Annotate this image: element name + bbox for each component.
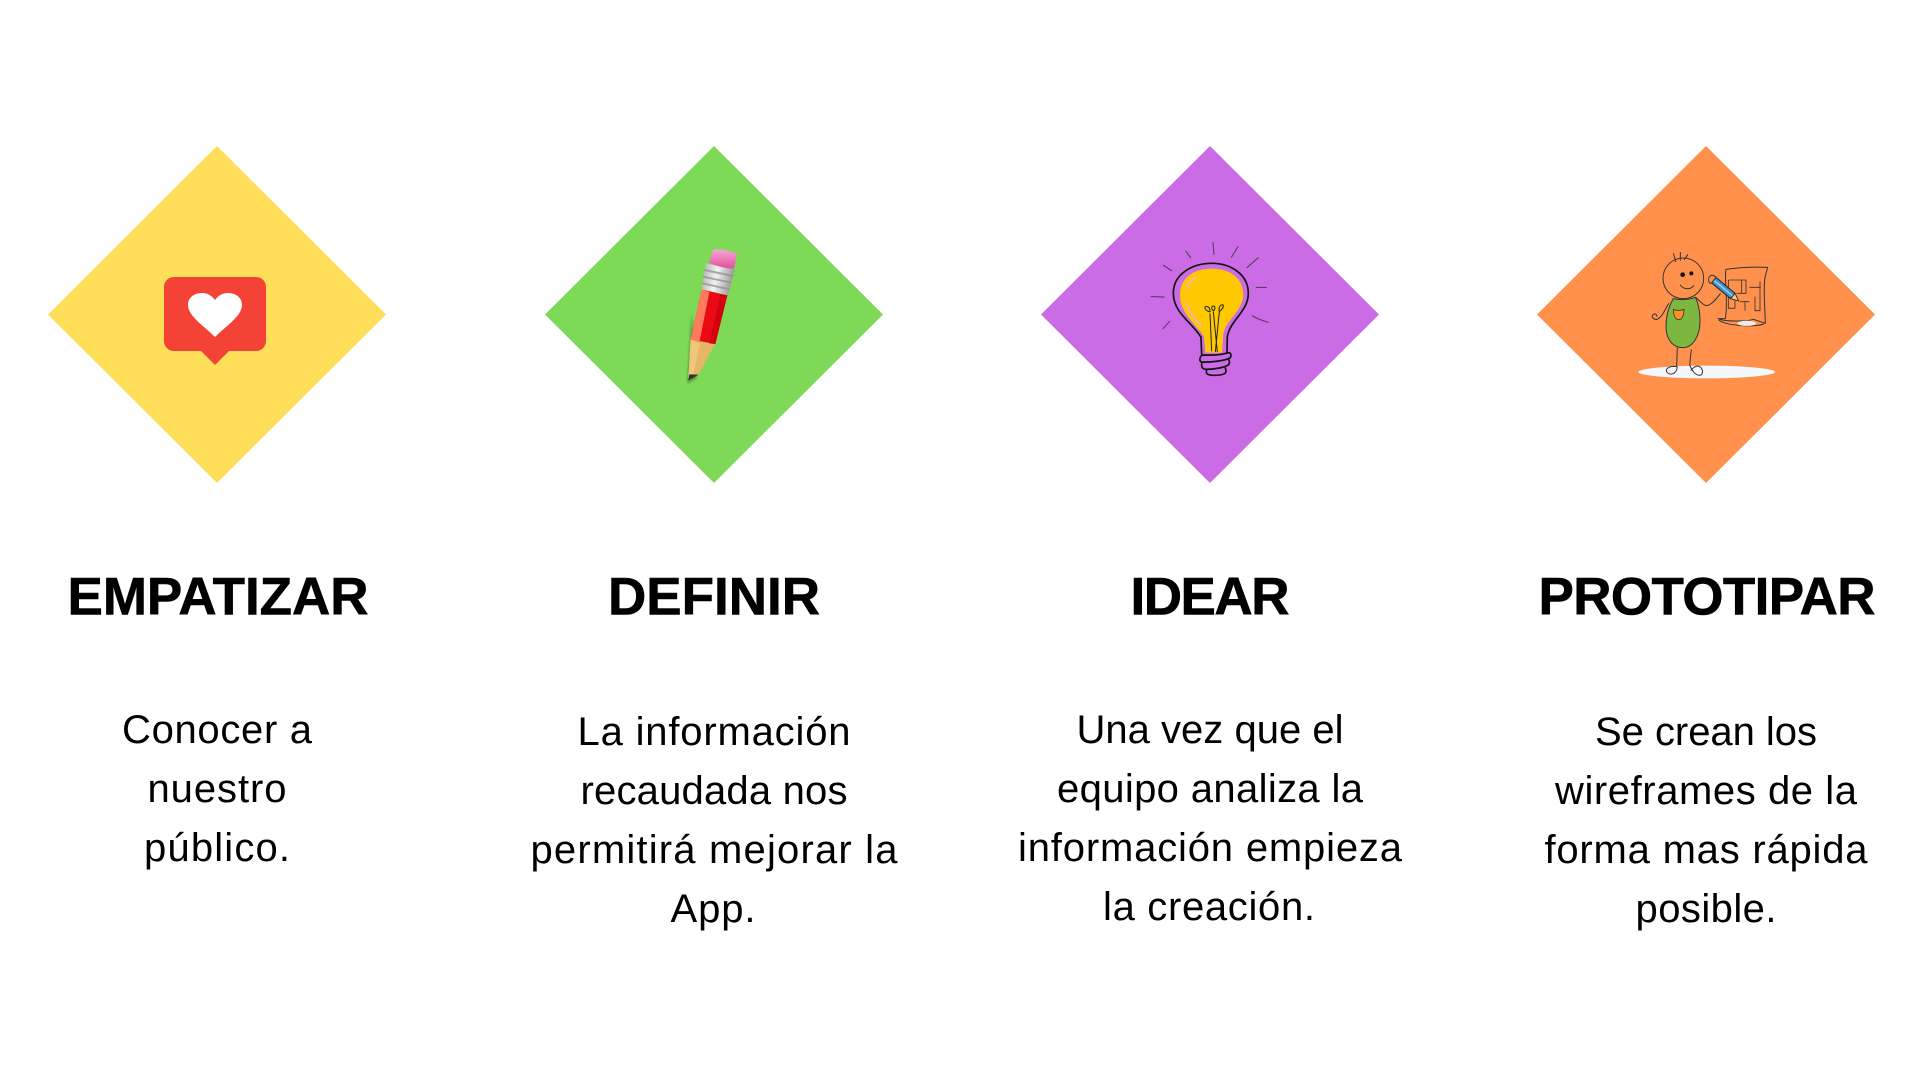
description: prototipar: posible.: [1636, 887, 1776, 931]
icon: heart notification: [164, 277, 266, 365]
description: idear: [1018, 708, 1403, 929]
description: idear: equipo analiza la: [1057, 767, 1364, 811]
yellow diamond: [48, 146, 386, 483]
description: definir: permitirá mejorar la: [530, 828, 898, 872]
icon: pencil: [687, 249, 737, 383]
description: empatizar: nuestro: [148, 767, 286, 811]
description: idear: la creación.: [1103, 885, 1315, 929]
icon: character drawing a plan: [1638, 252, 1775, 378]
description: definir: App.: [670, 887, 756, 931]
heading: empatizar: EMPATIZAR: [68, 568, 368, 626]
description: idear: Una vez que el: [1076, 708, 1344, 752]
panel: idear: [1018, 146, 1403, 929]
description: definir: recaudada nos: [580, 769, 848, 813]
purple diamond: [1041, 146, 1379, 483]
description: prototipar: Se crean los: [1595, 710, 1817, 754]
green diamond: [545, 146, 883, 483]
description: prototipar: wireframes de la: [1554, 769, 1858, 813]
description: empatizar: [122, 708, 313, 870]
description: prototipar: forma mas rápida: [1544, 828, 1868, 872]
heading: definir: DEFINIR: [608, 568, 820, 626]
description: empatizar: público.: [144, 826, 290, 870]
panel: prototipar: [1537, 146, 1876, 931]
description: definir: La información: [578, 710, 850, 754]
description: idear: información empieza: [1018, 826, 1403, 870]
description: prototipar: [1544, 710, 1868, 931]
panel: definir: [530, 146, 898, 931]
heading: prototipar: PROTOTIPAR: [1538, 568, 1876, 626]
description: empatizar: Conocer a: [122, 708, 313, 752]
orange diamond: [1537, 146, 1875, 483]
description: definir: [530, 710, 898, 931]
panel: empatizar: [48, 146, 386, 870]
icon: light bulb: [1151, 243, 1268, 375]
heading: idear: IDEAR: [1130, 568, 1290, 626]
